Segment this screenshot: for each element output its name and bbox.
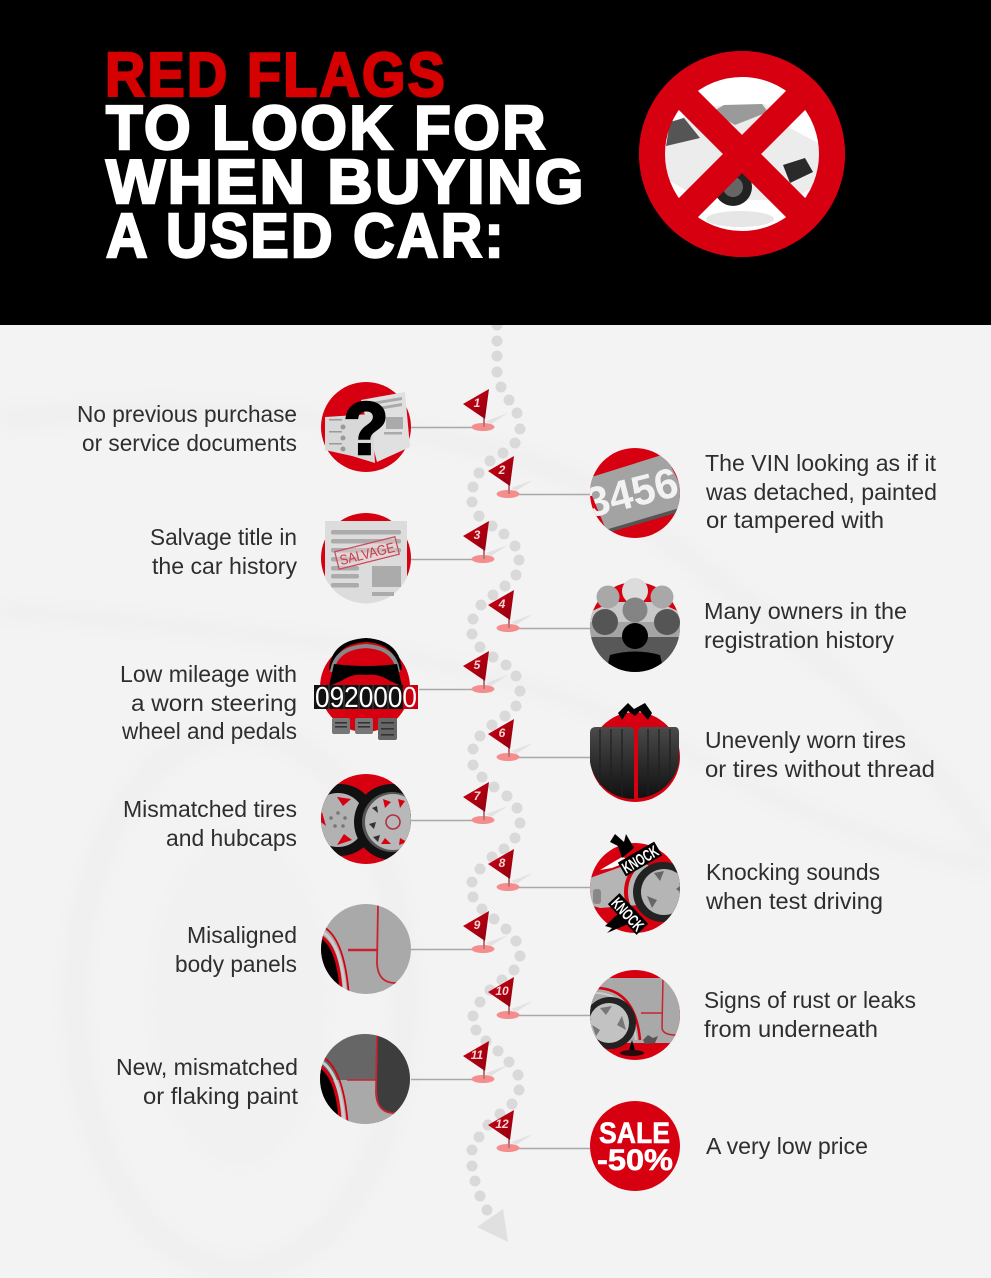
flag 4 <box>488 590 533 632</box>
text: no previous purchase: or service documents <box>82 430 297 456</box>
title: WHEN BUYING <box>106 148 586 217</box>
flag 3: 3 <box>474 528 481 542</box>
flag 10: 10 <box>495 984 509 998</box>
flag 2 <box>488 456 533 498</box>
icon: odometer, steering wheel and pedals: 0920000 <box>315 682 417 714</box>
dotted route <box>466 325 526 1216</box>
icon: unevenly worn tires <box>590 703 680 802</box>
text: salvage title: the car history <box>152 553 297 579</box>
flag 8: 8 <box>499 856 506 870</box>
text: mismatched tires: and hubcaps <box>166 825 297 851</box>
icon: prohibited car sign <box>639 51 845 257</box>
flag 11: 11 <box>471 1048 484 1062</box>
flag 9: 9 <box>474 918 481 932</box>
icon: mismatched tires and hubcaps <box>321 774 411 864</box>
text: misaligned panels <box>175 922 297 977</box>
flag 1 <box>463 389 508 431</box>
flag 7: 7 <box>474 789 482 803</box>
text: VIN tampering: was detached, painted <box>705 479 937 505</box>
icon: sale badge: -50% <box>597 1144 673 1177</box>
text: low mileage: a worn steering <box>131 690 297 716</box>
icon: rust or leaks <box>584 970 680 1060</box>
icon: tampered VIN: 3456 <box>581 458 683 527</box>
flag 1: 1 <box>474 396 481 410</box>
arrow: route end <box>477 1209 508 1242</box>
flag 9 <box>463 911 508 953</box>
text: flaking paint: New, mismatched <box>116 1054 298 1080</box>
flag 6: 6 <box>499 726 506 740</box>
text: no previous purchase <box>77 401 297 456</box>
text: misaligned panels: Misaligned <box>187 922 297 948</box>
title: TO LOOK FOR <box>106 94 548 163</box>
text: rust or leaks <box>704 987 916 1042</box>
flag 10 <box>488 977 533 1019</box>
icon: salvage title newspaper: SALVAGE <box>338 539 396 568</box>
connector lines <box>411 428 590 1148</box>
icon: knocking sounds: KNOCK <box>607 895 647 935</box>
text: many owners: registration history <box>704 627 894 653</box>
flag 7 <box>463 782 508 824</box>
title: A USED CAR: <box>106 202 506 271</box>
text: no previous purchase: No previous purchase <box>77 401 297 427</box>
header band <box>0 0 991 325</box>
text: rust or leaks: from underneath <box>704 1016 878 1042</box>
icon: sale badge <box>590 1101 680 1191</box>
text: worn tires <box>705 727 935 782</box>
text: VIN tampering: or tampered with <box>706 507 884 533</box>
text: knocking sounds: Knocking sounds <box>706 859 880 885</box>
icon: salvage title newspaper <box>321 513 411 603</box>
text: salvage title: Salvage title in <box>150 524 297 550</box>
flag 12 <box>488 1110 533 1152</box>
text: low mileage: wheel and pedals <box>121 718 297 744</box>
icon: sale badge: SALE <box>599 1117 670 1150</box>
icon: flaking paint <box>320 1034 410 1124</box>
flag 3 <box>463 521 508 563</box>
icon: many owners <box>590 578 680 680</box>
flag 2: 2 <box>498 463 506 477</box>
text: flaking paint <box>116 1054 298 1109</box>
text: knocking sounds: when test driving <box>705 888 883 914</box>
flag 12: 12 <box>495 1117 509 1131</box>
text: worn tires: or tires without thread <box>705 756 935 782</box>
text: low mileage <box>120 661 297 744</box>
text: many owners: Many owners in the <box>704 598 907 624</box>
icon: missing documents <box>321 382 411 472</box>
text: flaking paint: or flaking paint <box>143 1083 298 1109</box>
text: knocking sounds <box>705 859 883 914</box>
icon: knocking sounds <box>590 834 680 935</box>
flag 5: 5 <box>474 658 481 672</box>
flag 8 <box>488 849 533 891</box>
text: low mileage: Low mileage with <box>120 661 297 687</box>
text: VIN tampering: The VIN looking as if it <box>705 450 936 476</box>
page background <box>0 325 991 1278</box>
icon: tampered VIN <box>590 448 680 538</box>
icon: missing documents: ? <box>343 387 389 470</box>
flag 6 <box>488 719 533 761</box>
flag 11 <box>463 1041 508 1083</box>
icon: odometer, steering wheel and pedals <box>314 640 418 740</box>
text: rust or leaks: Signs of rust or leaks <box>704 987 916 1013</box>
title <box>105 41 586 271</box>
text: mismatched tires <box>123 796 297 851</box>
text: low price: A very low price <box>706 1133 868 1159</box>
title: RED FLAGS <box>105 41 447 110</box>
text: mismatched tires: Mismatched tires <box>123 796 297 822</box>
text: worn tires: Unevenly worn tires <box>705 727 906 753</box>
icon: misaligned body panels <box>320 904 411 998</box>
text: salvage title <box>150 524 297 579</box>
text: many owners <box>704 598 907 653</box>
text: misaligned panels: body panels <box>175 951 297 977</box>
flag 5 <box>463 651 508 693</box>
flag 4: 4 <box>498 597 506 611</box>
icon: knocking sounds: KNOCK <box>620 843 662 877</box>
text: VIN tampering <box>705 450 937 533</box>
